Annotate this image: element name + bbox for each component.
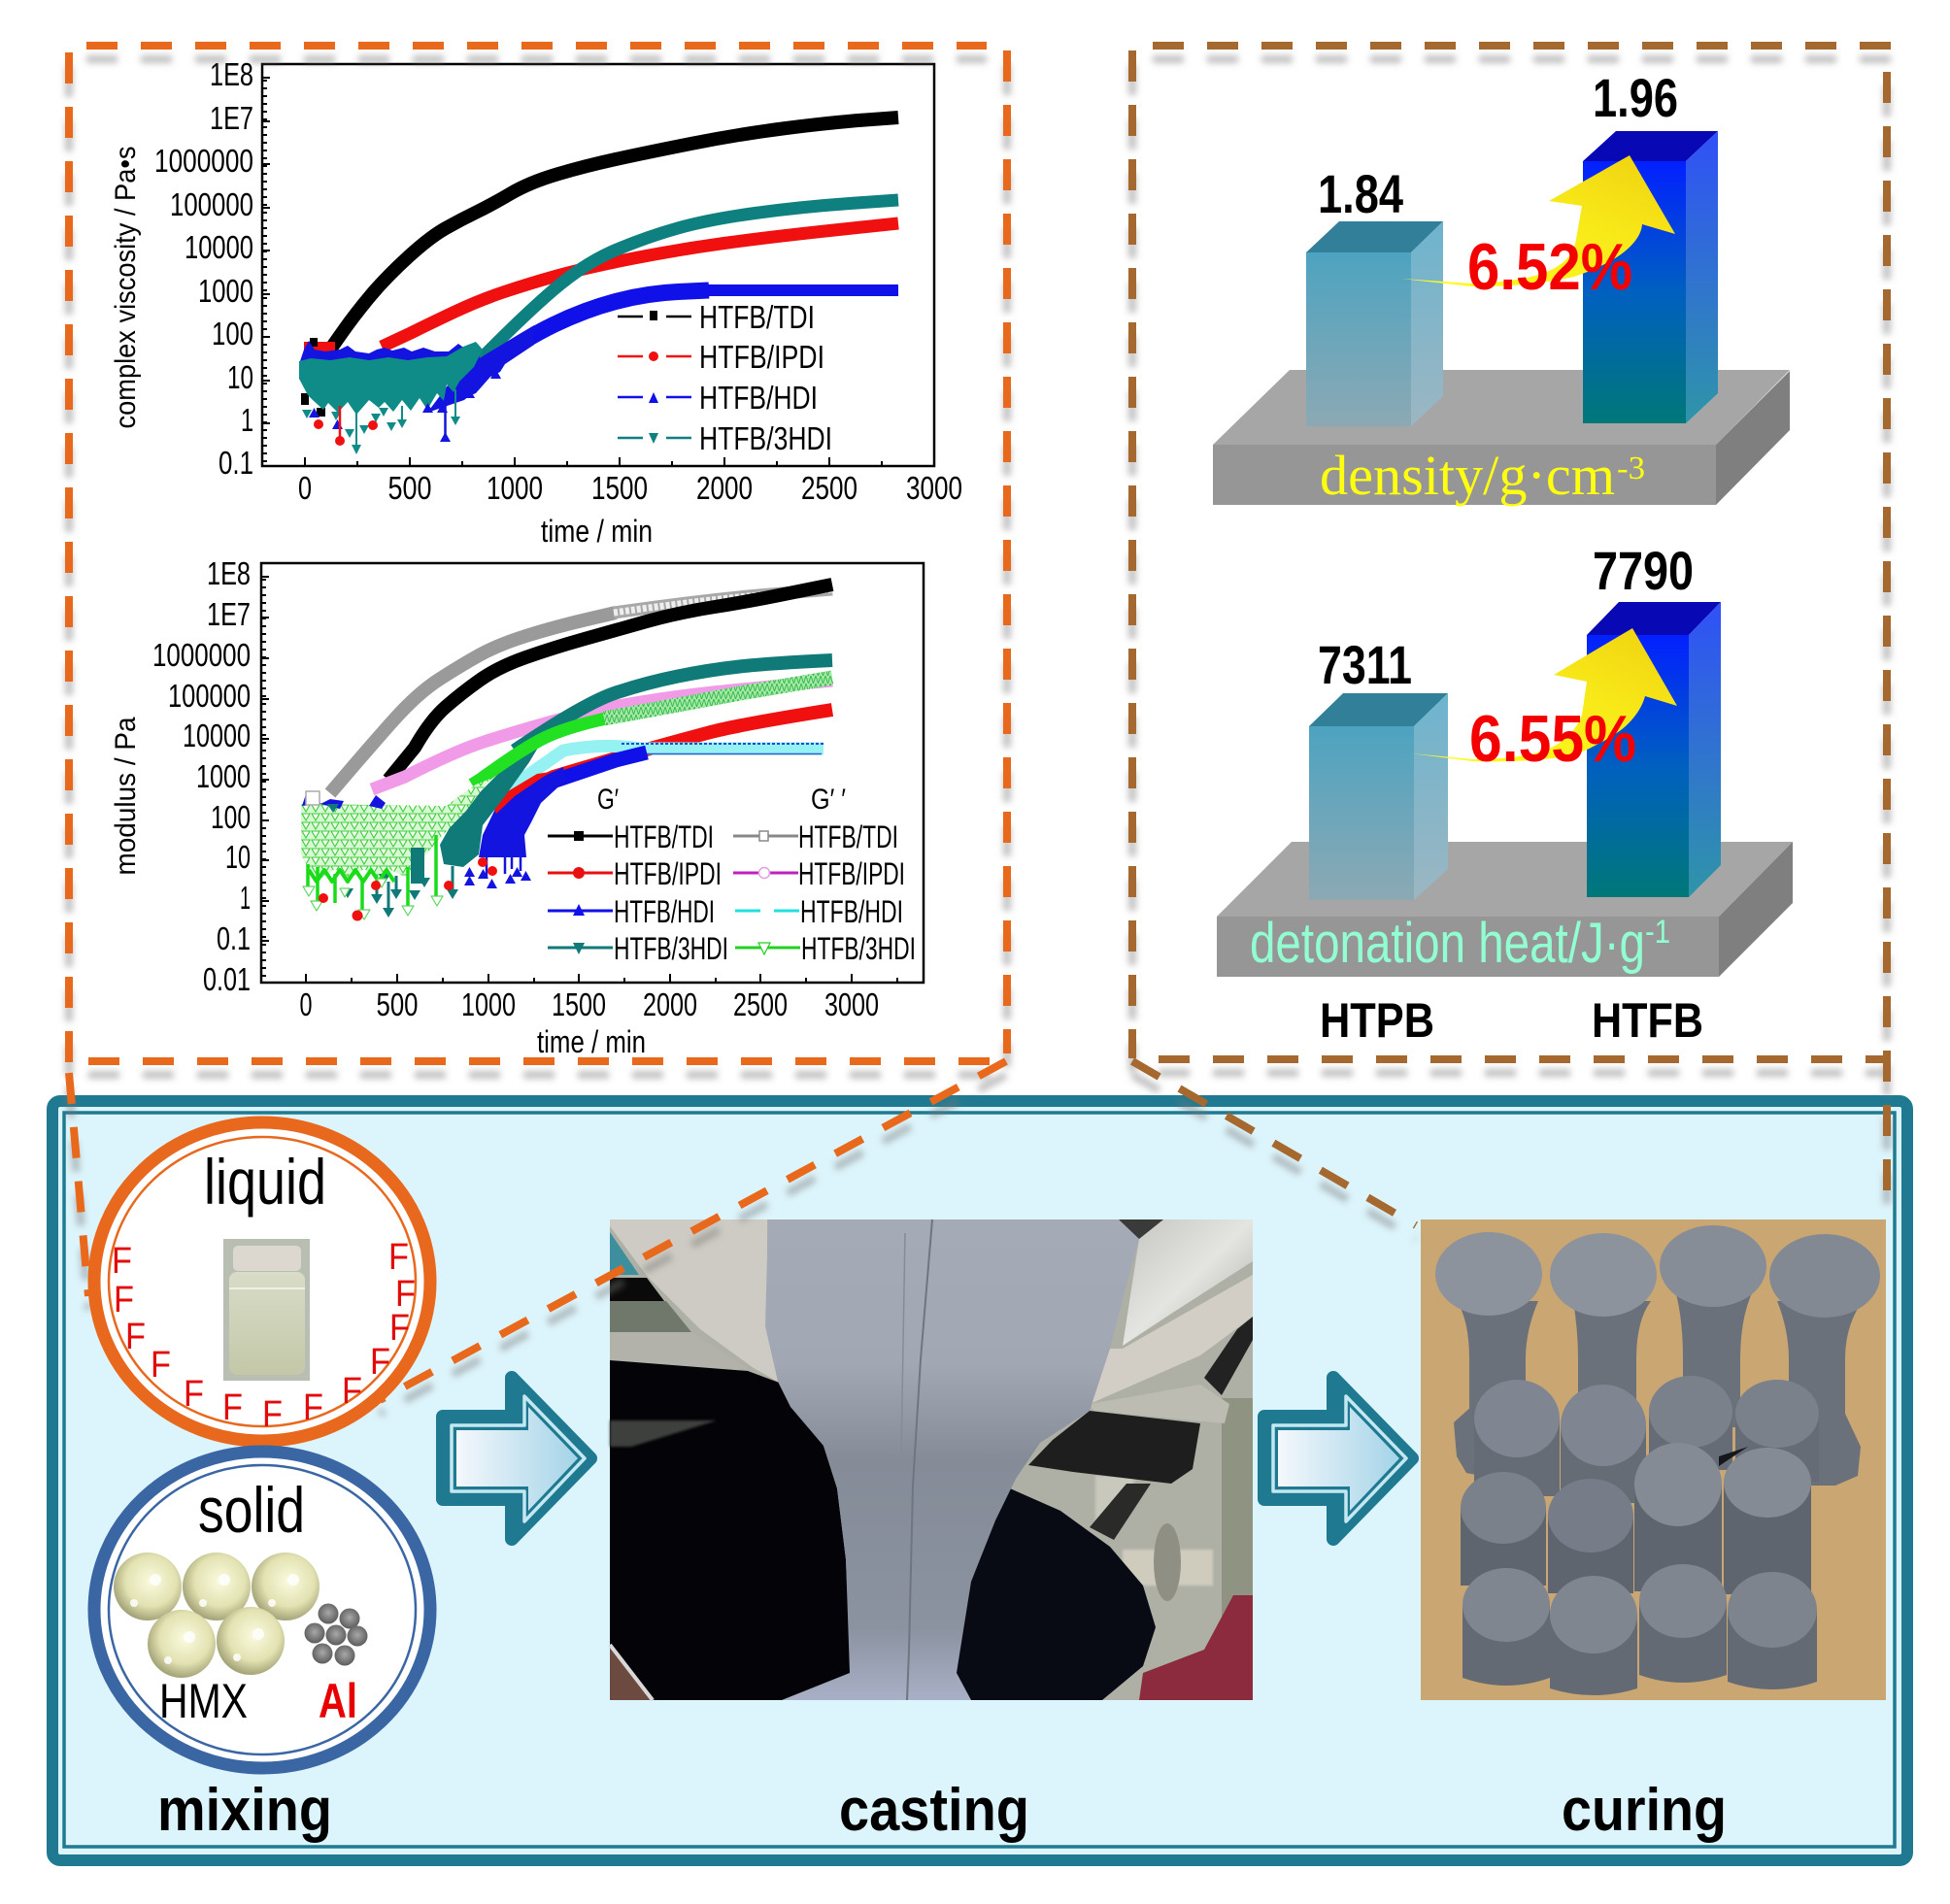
legend: modulus series: HTFB/IPDI [614, 856, 722, 891]
category labels: HTPB and HTFB: HTFB [1592, 993, 1703, 1048]
chart: complex viscosity versus time: 2500 [801, 470, 857, 506]
fluorine labels: F [388, 1237, 409, 1278]
chart: modulus versus time: 10 [225, 839, 251, 875]
chart: modulus versus time: 0.1 [217, 920, 251, 956]
chart: complex viscosity versus time: 0.1 [219, 445, 253, 481]
category labels: HTPB and HTFB: HTPB [1320, 993, 1434, 1048]
icon: Al particles [305, 1604, 367, 1666]
chart: modulus versus time: 1 [240, 880, 251, 916]
axis label: detonation heat: detonation heat/J·g [1250, 912, 1645, 975]
chart: modulus versus time: 1000 [461, 986, 516, 1022]
arrow: density increase [1401, 155, 1675, 286]
fluorine labels: F [222, 1387, 243, 1428]
chart: complex viscosity versus time: 100000 [170, 186, 253, 222]
step labels: mixing [157, 1777, 332, 1844]
chart: modulus versus time: 0 [299, 986, 313, 1022]
step labels: casting [839, 1777, 1029, 1844]
axis label: detonation heat: -1 [1645, 914, 1670, 951]
value labels: density: 1.84 [1318, 163, 1403, 224]
front row cylinders [1462, 1564, 1817, 1695]
chart: complex viscosity versus time: 1000 [198, 273, 253, 309]
fluorine labels: F [184, 1374, 204, 1415]
chart: complex viscosity versus time: 500 [388, 470, 431, 506]
chart: modulus versus time [110, 555, 924, 1059]
chart: modulus versus time: 2000 [643, 986, 697, 1022]
chart: complex viscosity versus time: 1 [241, 402, 253, 438]
fluorine labels [112, 1237, 416, 1435]
legend: modulus series: HTFB/3HDI [801, 931, 916, 966]
chart: modulus versus time: 1000000 [152, 637, 251, 673]
arrow: detonation heat increase [1411, 628, 1677, 761]
fluorine labels: F [151, 1345, 171, 1386]
curves: viscosity data series [299, 117, 898, 454]
second row cylinders [1474, 1376, 1819, 1503]
chart: modulus versus time: 100 [211, 799, 251, 835]
chart: modulus versus time: 100000 [168, 678, 251, 714]
value labels: detonation heat [1318, 540, 1694, 776]
chart: complex viscosity versus time: time / min [541, 514, 653, 549]
legend: modulus series: HTFB/3HDI [614, 931, 728, 966]
fluorine labels: F [389, 1308, 410, 1349]
third row cylinders [1461, 1443, 1811, 1594]
axis label: density: -3 [1617, 451, 1645, 486]
chart: modulus versus time: 500 [377, 986, 418, 1022]
legend: modulus series: G′ ′ [811, 784, 846, 816]
value labels: detonation heat: 7790 [1593, 540, 1694, 601]
legend: modulus series: HTFB/TDI [614, 819, 714, 854]
chart: complex viscosity versus time: 3000 [906, 470, 962, 506]
value labels: density [1318, 67, 1678, 304]
fluorine labels: F [112, 1241, 132, 1282]
legend: modulus series: HTFB/IPDI [798, 856, 905, 891]
axis label: density: density/g·cm [1320, 444, 1615, 507]
chart: modulus versus time: 2500 [733, 986, 788, 1022]
fluorine labels: F [262, 1394, 283, 1435]
value labels: density: 1.96 [1593, 67, 1678, 128]
3D bar chart: detonation heat [1217, 540, 1793, 977]
arrow: mixing to casting [443, 1378, 590, 1539]
arrow: casting to curing [1264, 1378, 1412, 1539]
legend: modulus series: HTFB/HDI [614, 894, 715, 929]
fluorine labels: F [395, 1274, 416, 1315]
step labels [157, 1777, 1727, 1844]
photo: casting [610, 1219, 1253, 1700]
chart: complex viscosity versus time: 1000 [487, 470, 543, 506]
legend: viscosity series [618, 299, 832, 456]
photo: cured specimens [1421, 1219, 1886, 1700]
step labels: curing [1562, 1777, 1727, 1844]
chart: modulus versus time: 1E7 [207, 596, 251, 632]
fluorine labels: F [370, 1342, 390, 1383]
category labels: HTPB and HTFB [1320, 993, 1703, 1048]
value labels: detonation heat: 7311 [1318, 634, 1412, 695]
legend: modulus series: HTFB/TDI [798, 819, 898, 854]
dashed frame: rheology charts [69, 46, 1007, 1400]
fluorine labels: F [303, 1387, 323, 1428]
legend: modulus series [548, 784, 916, 966]
legend: modulus series: HTFB/HDI [800, 894, 903, 929]
chart: modulus versus time: 3000 [824, 986, 879, 1022]
dashed frame: performance charts [1132, 46, 1892, 1225]
chart: modulus versus time: modulus / Pa [110, 717, 142, 876]
panel: process background [52, 1101, 1907, 1860]
fluorine labels: F [342, 1371, 362, 1412]
mixing: solid circle [94, 1452, 430, 1768]
icon: resin jar [223, 1239, 310, 1381]
chart: complex viscosity versus time [110, 56, 962, 549]
value labels: density: 6.52% [1467, 230, 1632, 304]
chart: complex viscosity versus time: 10 [227, 359, 253, 395]
chart: complex viscosity versus time: 1500 [591, 470, 648, 506]
chart: complex viscosity versus time: 1E7 [210, 100, 253, 136]
mixing: liquid circle [94, 1122, 430, 1441]
chart: complex viscosity versus time: 1E8 [210, 56, 253, 92]
mixing: solid circle: Al [319, 1674, 357, 1728]
mixing: liquid circle: liquid [204, 1146, 326, 1218]
value labels: detonation heat: 6.55% [1469, 702, 1636, 776]
chart: complex viscosity versus time: 0 [298, 470, 312, 506]
chart: modulus versus time: 1000 [196, 758, 251, 794]
chart: modulus versus time: 1E8 [207, 555, 251, 591]
chart: complex viscosity versus time: 1000000 [154, 143, 253, 179]
curves: modulus data series [301, 585, 832, 920]
legend: viscosity series: HTFB/HDI [699, 380, 818, 416]
chart: modulus versus time: time / min [537, 1024, 646, 1059]
fluorine labels: F [114, 1280, 134, 1320]
back row dumbbell specimens [1435, 1225, 1880, 1486]
chart: modulus versus time: 0.01 [203, 961, 251, 997]
mixing: solid circle: solid [198, 1474, 305, 1546]
chart: complex viscosity versus time: 2000 [696, 470, 753, 506]
legend: viscosity series: HTFB/3HDI [699, 420, 832, 456]
chart: complex viscosity versus time: 10000 [185, 229, 253, 265]
chart: modulus versus time: 10000 [183, 718, 251, 753]
chart: complex viscosity versus time: 100 [212, 316, 253, 351]
chart: complex viscosity versus time: complex viscosity / Pa•s [110, 146, 142, 429]
legend: modulus series: G′ [597, 784, 619, 816]
legend: viscosity series: HTFB/TDI [699, 299, 815, 335]
legend: viscosity series: HTFB/IPDI [699, 339, 824, 375]
mixing: solid circle: HMX [159, 1674, 248, 1728]
chart: modulus versus time: 1500 [552, 986, 606, 1022]
icon: HMX particles [114, 1553, 319, 1678]
fluorine labels: F [125, 1317, 146, 1357]
3D bar chart: density [1213, 67, 1790, 507]
